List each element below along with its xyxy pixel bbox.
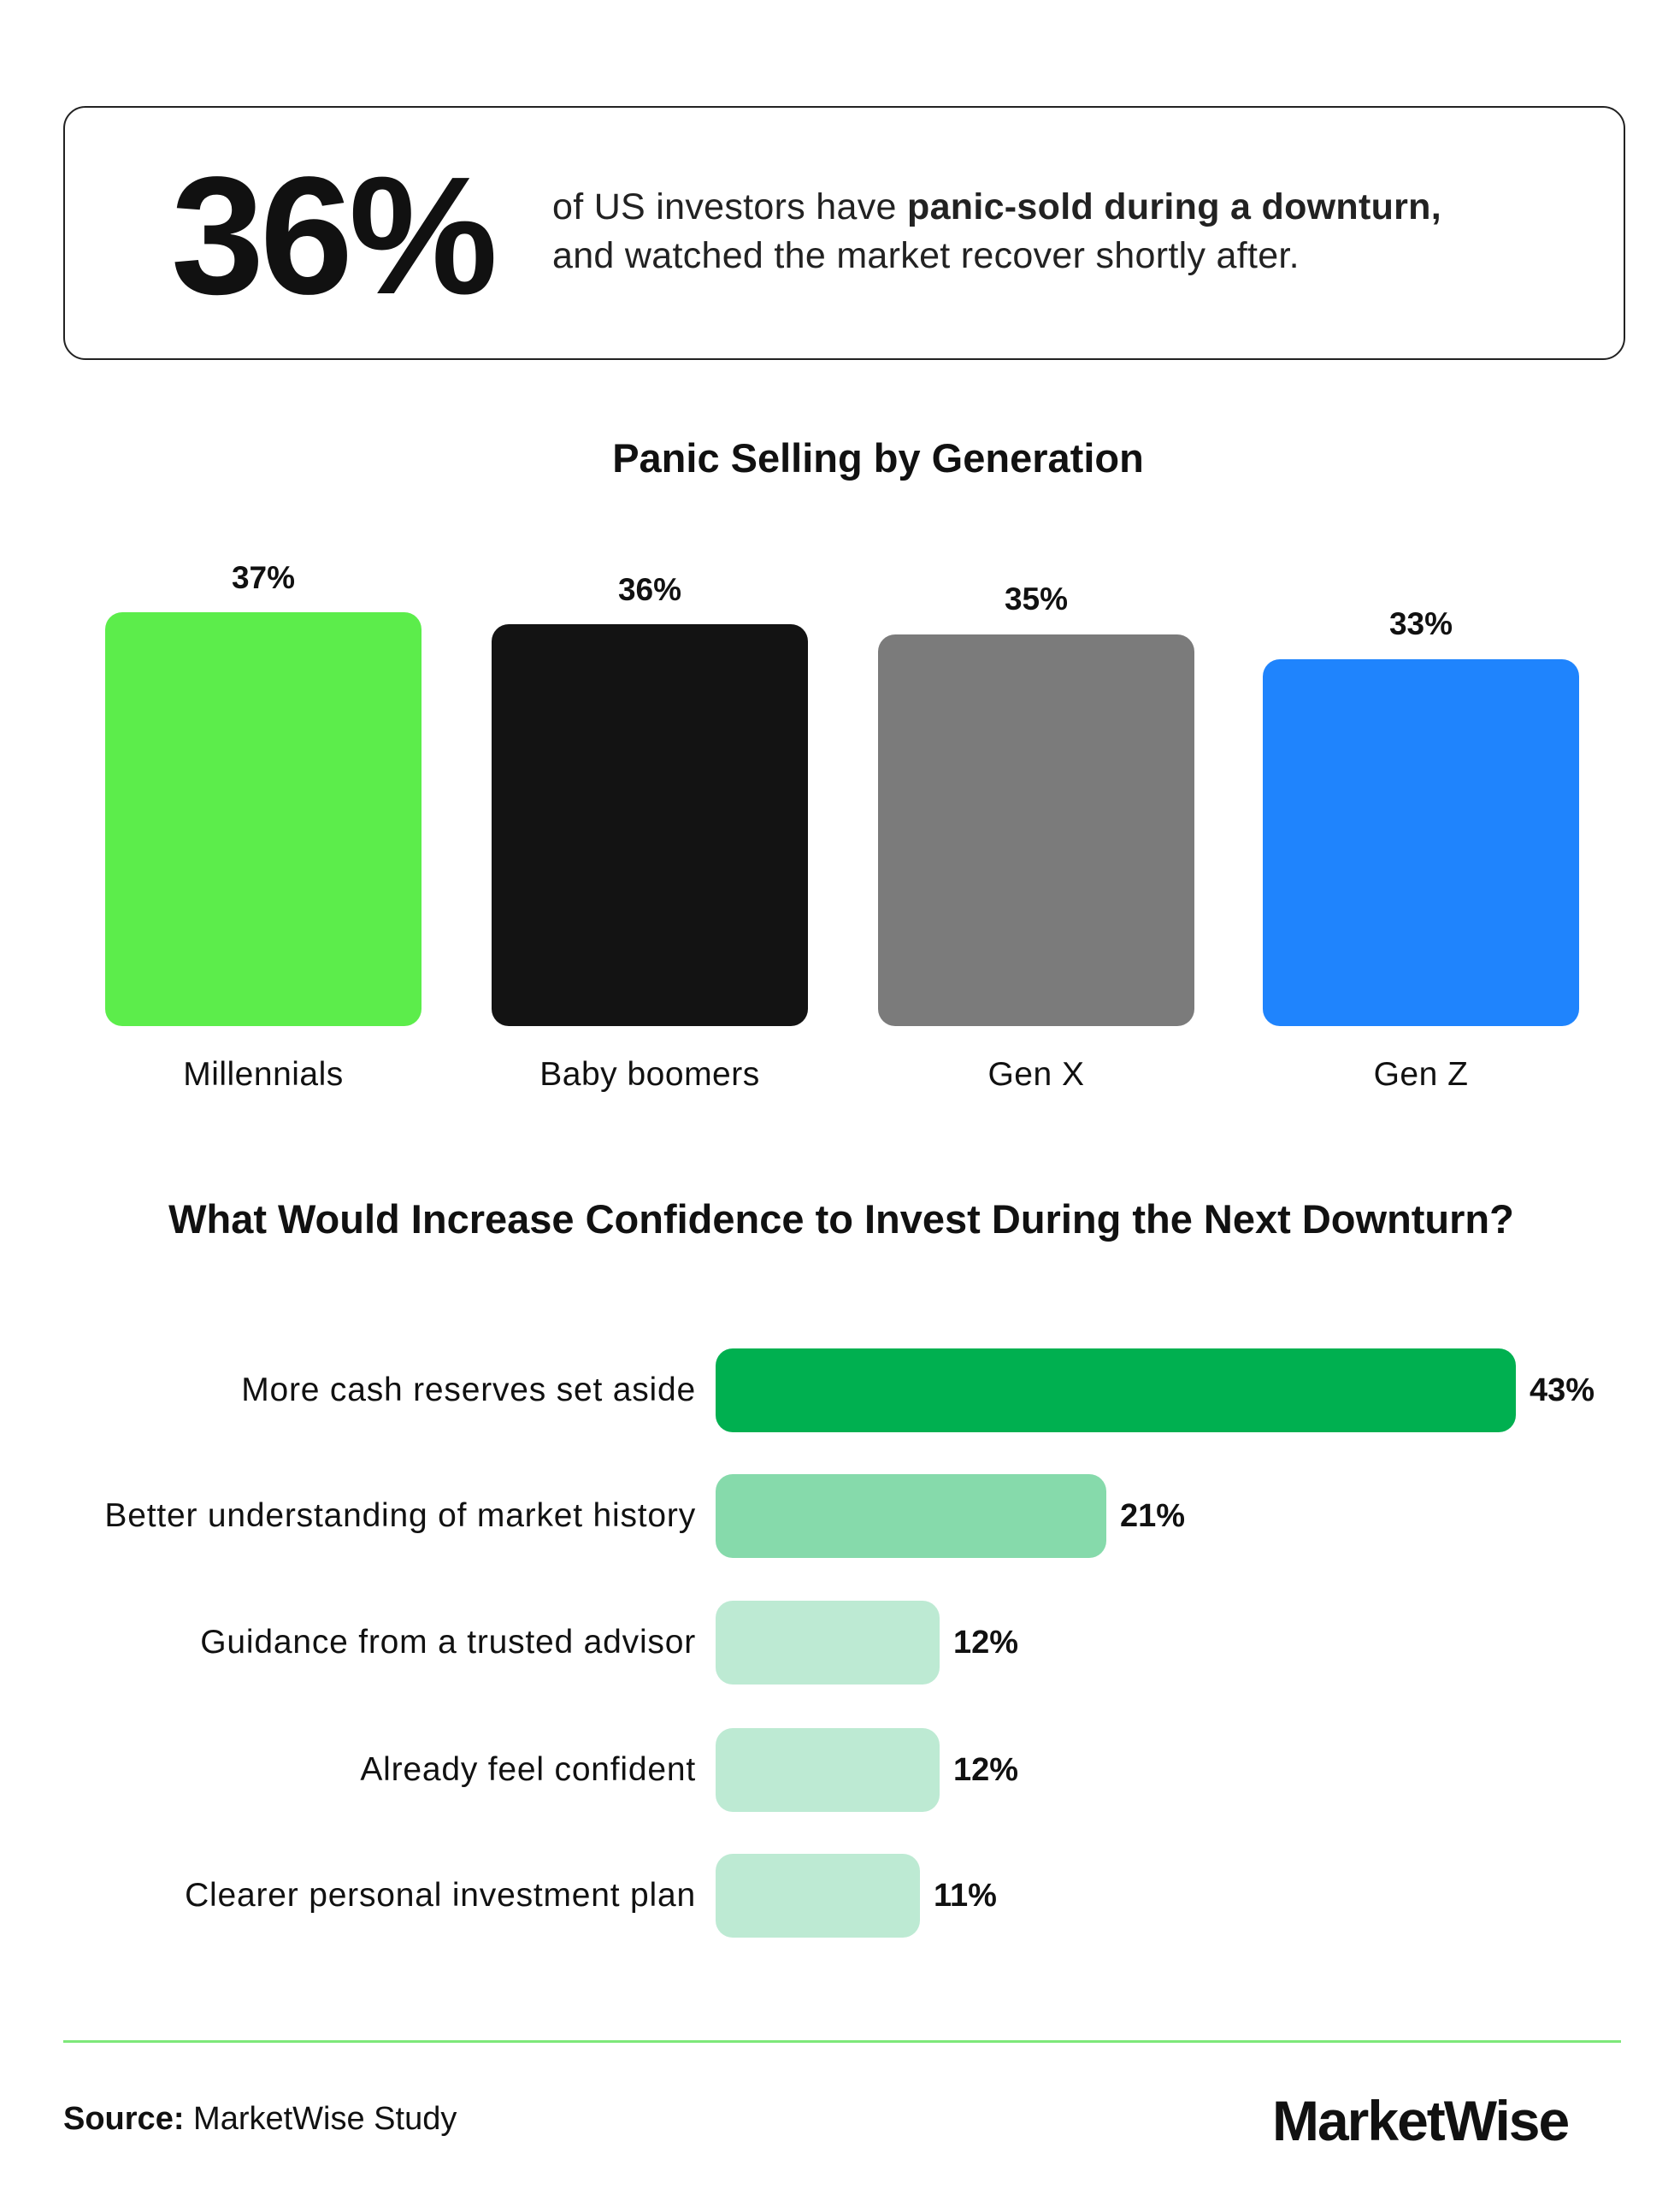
horizontal bar chart: confidence: 12% — [953, 1625, 1018, 1661]
horizontal bar chart: confidence: Guidance from a trusted advisor — [200, 1624, 696, 1661]
horizontal bar chart: confidence: Already feel confident — [360, 1751, 696, 1788]
stat description: and watched the market recover shortly after. — [552, 235, 1300, 276]
horizontal bar chart: confidence: Clearer personal investment plan — [185, 1877, 696, 1914]
bar chart: generations: 33% — [1389, 606, 1453, 641]
bar chart: generations: 37% — [232, 560, 295, 595]
title: Panic Selling by Generation: Panic Selling by Generation — [612, 435, 1144, 481]
horizontal bar chart: confidence: 11% — [934, 1878, 997, 1914]
bar chart: generations: Gen X — [987, 1056, 1085, 1093]
logo: MarketWise: MarketWise — [1272, 2089, 1568, 2152]
bar chart: generations: Millennials — [183, 1056, 344, 1093]
stat description: of US investors have panic-sold during a downturn, — [552, 186, 1441, 227]
horizontal bar chart: confidence: Better understanding of market history — [104, 1497, 696, 1534]
bar chart: generations: 36% — [618, 572, 681, 607]
horizontal bar chart: confidence: More cash reserves set aside — [241, 1372, 696, 1408]
bar chart: generations: 35% — [1005, 581, 1068, 617]
stat description — [552, 186, 1441, 276]
horizontal bar chart: confidence — [104, 1348, 1595, 1938]
source: Source: MarketWise Study — [63, 2101, 457, 2137]
horizontal bar chart: confidence: 21% — [1120, 1498, 1185, 1534]
title: confidence: What Would Increase Confidence to Invest During the Next Downturn? — [168, 1196, 1514, 1242]
horizontal bar chart: confidence: 43% — [1530, 1372, 1595, 1408]
stat box — [63, 106, 1625, 360]
bar chart: generations: Gen Z — [1374, 1056, 1468, 1093]
horizontal bar chart: confidence: 12% — [953, 1752, 1018, 1788]
bar chart: generations: Baby boomers — [539, 1056, 760, 1093]
bar chart: generations — [105, 560, 1579, 1093]
big stat 36%: 36% — [171, 142, 493, 329]
